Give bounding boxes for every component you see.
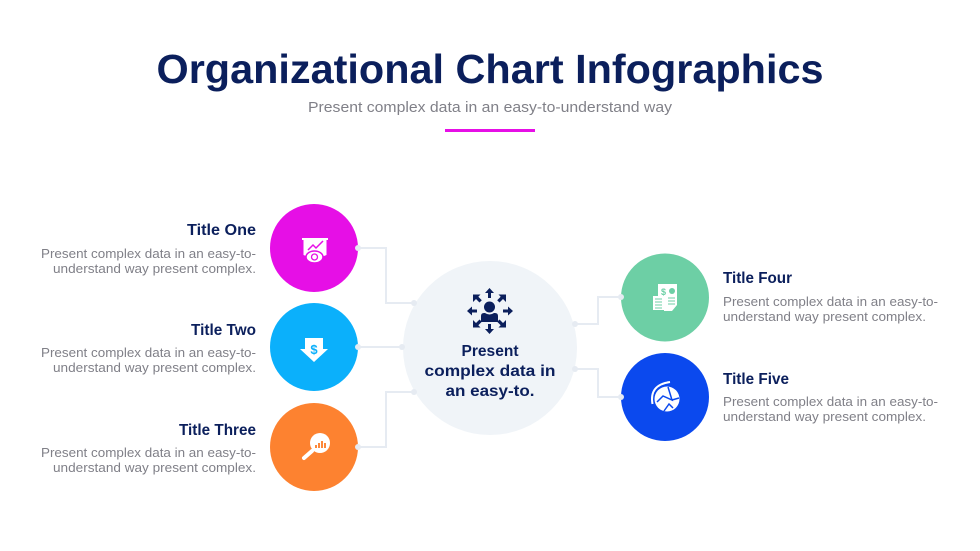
icon: person with radiating arrows [467, 288, 513, 334]
icon: chart with eye [302, 238, 328, 263]
circle four: green [621, 254, 709, 342]
text: Title Three: Present complex data in an easy-to- [41, 446, 256, 460]
text: Title One: Title One [187, 222, 256, 239]
center text [424, 343, 556, 400]
text: Title One: Present complex data in an easy-to- [41, 247, 256, 261]
text: Title Five: Present complex data in an easy-to- [723, 395, 938, 409]
center circle [403, 261, 577, 435]
text: Title One: understand way present complex. [53, 262, 256, 276]
text: Title Two [41, 322, 256, 375]
circle two: sky blue [270, 303, 358, 391]
text: Title Three [41, 422, 256, 475]
icon: magnifier with bars [304, 433, 330, 458]
text: Title Five [723, 371, 938, 424]
text: Title Two: understand way present complex. [53, 361, 256, 375]
connectors between center and circles [358, 248, 621, 447]
center text: Present [462, 343, 519, 360]
text: Title Four: Title Four [723, 270, 792, 287]
text: Title Two: Present complex data in an easy-to- [41, 346, 256, 360]
title underline accent [445, 129, 535, 132]
text: Title Three: understand way present complex. [53, 461, 256, 475]
icon: globe with orbit arrow [652, 382, 680, 412]
circle three: orange [270, 403, 358, 491]
text: Title One [41, 222, 256, 276]
text: Title Two: Title Two [191, 322, 256, 339]
text: Title Five: understand way present complex. [723, 410, 926, 424]
connector dots [355, 245, 624, 450]
icon: financial documents and calculator: $ [661, 287, 666, 297]
text: Title Three: Title Three [179, 422, 256, 439]
circle one: magenta [270, 204, 358, 292]
subtitle: Present complex data in an easy-to-understand way [308, 99, 673, 116]
text: Title Four [723, 270, 938, 324]
text: Title Four: understand way present complex. [723, 310, 926, 324]
circle five: blue [621, 353, 709, 441]
text: Title Four: Present complex data in an easy-to- [723, 295, 938, 309]
text: Title Five: Title Five [723, 371, 789, 388]
title: Organizational Chart Infographics [156, 46, 824, 92]
icon: dollar down arrow: $ [310, 342, 318, 357]
center text: an easy-to. [446, 383, 534, 400]
center text: complex data in [424, 363, 556, 380]
